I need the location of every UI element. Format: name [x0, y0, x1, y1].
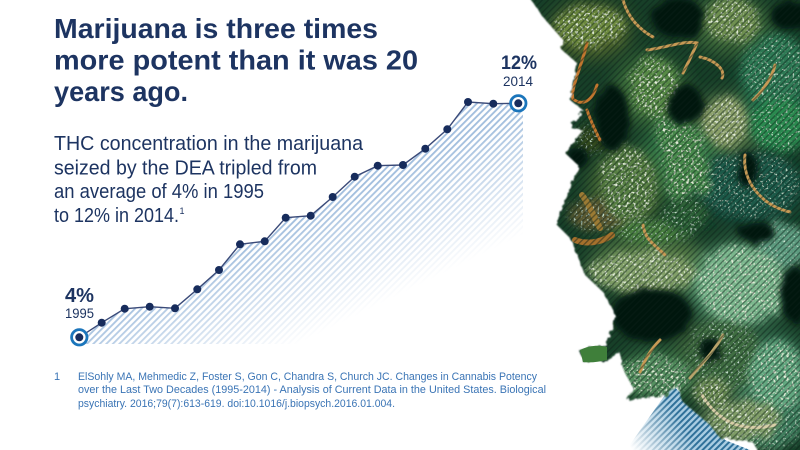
footnote: over the Last Two Decades (1995-2014) - Analysis of Current Data in the United States. Biological — [78, 384, 546, 396]
start label: 4% 1995: 4% — [65, 285, 94, 307]
end label: 12% 2014: 12% — [501, 53, 537, 74]
end label: 12% 2014: 2014 — [503, 74, 533, 89]
description text: to 12% in 2014. — [54, 205, 179, 227]
hatched area under the line — [79, 102, 523, 344]
footnote: 1 — [54, 371, 60, 383]
footnote: psychiatry. 2016;79(7):613-619. doi:10.1016/j.biopsych.2016.01.004. — [78, 398, 395, 410]
mid green foliage — [568, 36, 800, 450]
description text: an average of 4% in 1995 — [54, 181, 264, 203]
photo: cannabis bud — [520, 0, 800, 450]
start marker 1995 — [72, 330, 87, 345]
description text: 1 — [180, 206, 185, 216]
data points — [98, 98, 497, 327]
end label: 12% 2014 — [501, 53, 537, 89]
blue shadow below the bud — [632, 388, 750, 450]
start label: 4% 1995 — [65, 285, 94, 321]
description text — [54, 133, 364, 227]
frosted light clusters — [556, 0, 800, 440]
orange pistils — [573, 0, 790, 427]
deep shadow areas — [568, 0, 800, 364]
bud silhouette and texture — [520, 0, 800, 450]
title: Marijuana is three times — [54, 13, 378, 44]
footnote: ElSohly MA, Mehmedic Z, Foster S, Gon C, Chandra S, Church JC. Changes in Cannabis Potency — [78, 371, 537, 383]
start label: 4% 1995: 1995 — [65, 306, 94, 321]
footnote — [54, 371, 546, 410]
title: more potent than it was 20 — [54, 44, 418, 76]
description text: seized by the DEA tripled from — [54, 157, 317, 179]
title — [54, 13, 418, 107]
description text: THC concentration in the marijuana — [54, 133, 364, 155]
title: years ago. — [54, 76, 188, 107]
small leaf — [580, 346, 607, 362]
line chart: THC concentration 1995 to 2014 — [72, 96, 526, 345]
trend line — [79, 102, 518, 337]
end marker 2014 — [511, 96, 526, 111]
blurred green underlay — [550, 0, 800, 449]
